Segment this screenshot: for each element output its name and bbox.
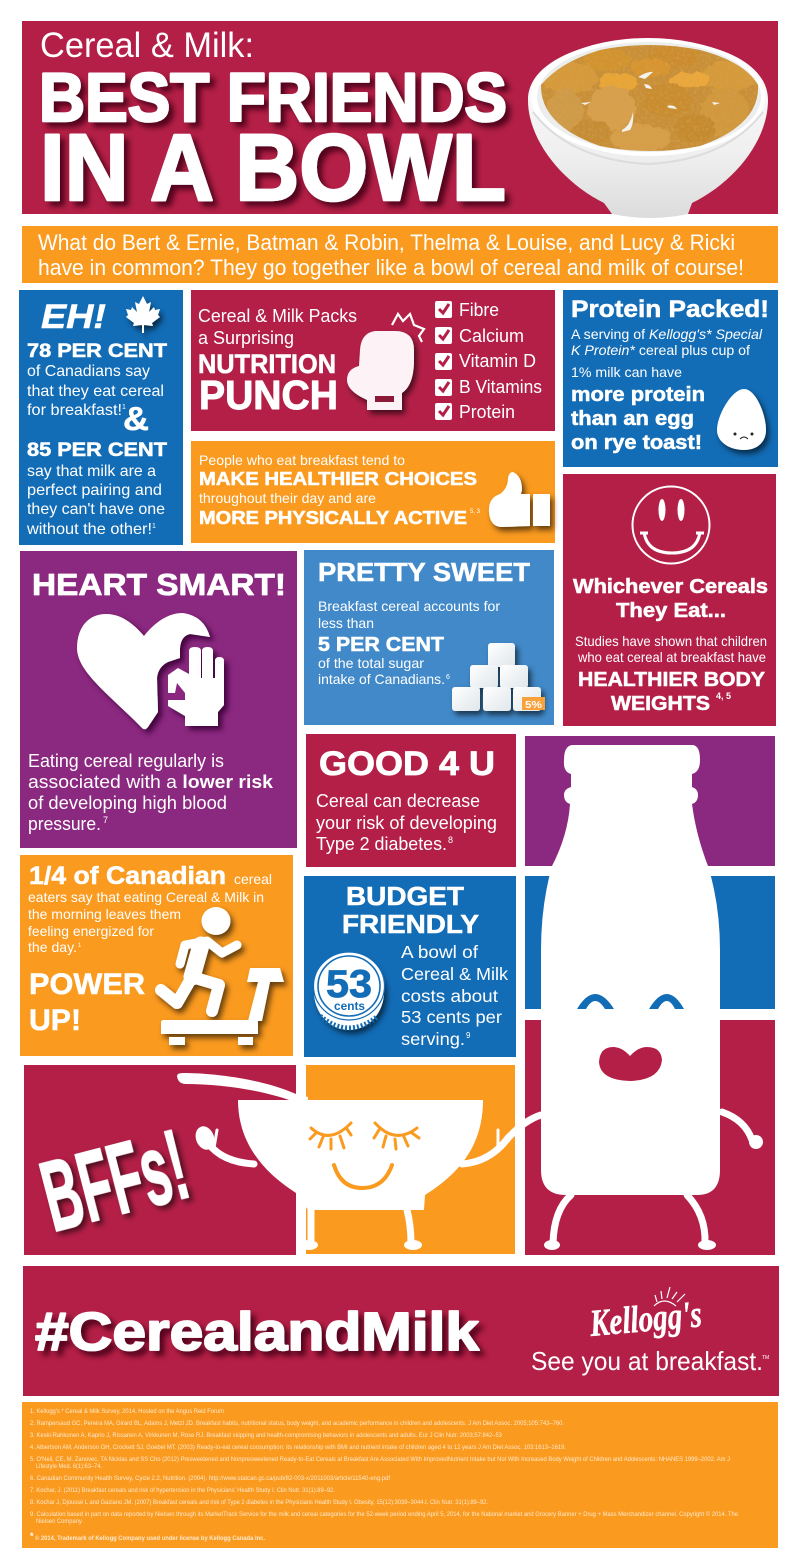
panel: protein packed: A serving of Kellogg's* Special [571, 326, 763, 342]
panel: protein packed: on rye toast! [571, 432, 702, 454]
panel: eh canadians [19, 290, 183, 545]
panel: pretty sweet: intake of Canadians. [318, 671, 445, 687]
tagline: See you at breakfast. [531, 1346, 763, 1376]
panel: heart smart: associated with a lower risk [28, 771, 274, 792]
panel: good 4 u: 8 [448, 835, 453, 845]
panel: budget friendly: serving. [401, 1029, 465, 1049]
character: milk bottle [508, 745, 763, 1250]
panel: whichever cereals [563, 474, 776, 726]
bowl limbs [208, 1130, 508, 1244]
panel: pretty sweet: 6 [446, 674, 450, 681]
references panel: Nielsen Company. [36, 1519, 83, 1525]
stat 85 per cent: 1 [152, 523, 156, 530]
panel: good 4 u: Type 2 diabetes. [316, 834, 447, 854]
icon: sugar cubes [452, 643, 545, 711]
panel: heart smart: pressure. [28, 813, 101, 834]
icon: heart and hand [77, 613, 224, 729]
panel: good 4 u [306, 734, 516, 867]
panel: healthier choices: MORE PHYSICALLY ACTIVE [199, 508, 467, 528]
panel: pretty sweet: PRETTY SWEET [318, 557, 530, 587]
panel: budget friendly: BUDGET [346, 881, 464, 911]
panel: whichever cereals: Studies have shown that children [575, 633, 767, 649]
heading nutrition punch: PUNCH [199, 372, 338, 418]
references panel: 2. Rampersaud GC, Pereira MA, Girard BL, Adams J, Metzl JD. Breakfast habits, nutritional status, body weight, and academic performance in children and adolescents. J Am Diet Assoc. 2005;105:743–760. [30, 1421, 564, 1427]
references panel [22, 1402, 778, 1548]
title: IN A BOWL [40, 115, 506, 221]
intro band: have in common? They go together like a bowl of cereal and milk of course! [38, 255, 744, 280]
panel: budget friendly: A bowl of [401, 942, 478, 962]
stat 78 per cent: 1 [122, 404, 126, 411]
hashtag banner: TM [762, 1355, 769, 1361]
stat 78 per cent: for breakfast! [27, 402, 122, 419]
ampersand: & [123, 400, 149, 437]
panel: whichever cereals: WEIGHTS [611, 693, 710, 715]
panel: budget friendly [304, 876, 516, 1057]
panel: power up: cereal [234, 871, 272, 887]
heading nutrition punch [198, 349, 338, 418]
references panel: 8. Kochar J, Djoussé L and Gaziano JM. (2007) Breakfast cereals and risk of Type 2 diabetes in the Physicians Health Study I. Obesity, 15(12):3039–3044.I. Clin Nutr. 31(1):89–92. [30, 1500, 488, 1506]
panel: heart smart: Eating cereal regularly is [28, 750, 224, 771]
icon: treadmill runner [161, 907, 284, 1045]
panel: power up: POWER [29, 968, 145, 1001]
checklist: Protein [459, 402, 515, 422]
references panel: 7. Kochar, J. (2011) Breakfast cereals and risk of hypertension in the Physicians' Health Study I. Clin Nutr. 31(1):89–92. [30, 1488, 335, 1494]
panel: whichever cereals: who eat cereal at breakfast have [577, 649, 766, 665]
panel: budget friendly: 9 [466, 1031, 471, 1040]
panel: heart smart: of developing high blood [28, 792, 227, 813]
badge 5 percent: 5% [525, 700, 542, 711]
stat 85 per cent: say that milk are a [27, 463, 156, 480]
bffs label: BFFs! [30, 1109, 199, 1253]
panel: power up: the morning leaves them [28, 906, 181, 922]
bowl of cereal photo [528, 38, 768, 218]
panel: protein packed: Protein Packed! [571, 296, 769, 323]
panel: power up: UP! [29, 1004, 81, 1037]
panel: good 4 u: GOOD 4 U [319, 745, 495, 783]
bowl eyes [310, 1123, 419, 1149]
icon: maple leaf [126, 296, 160, 333]
panel: power up: feeling energized for [28, 923, 154, 939]
checklist: B Vitamins [459, 377, 542, 397]
panel: power up: the day. [28, 939, 77, 955]
panel: pretty sweet: of the total sugar [318, 655, 424, 671]
references panel: 9. Calculation based in part on data reported by Nielsen through its MarketTrack Service for the milk and cereal categories for the 52-week period ending April 5, 2014, for the National market and Grocery Banner + Drug + Mass Merchandizer channel. Copyright © 2014. The [30, 1511, 739, 1518]
stat 85 per cent [26, 440, 167, 538]
stat 85 per cent: 85 PER CENT [27, 440, 167, 461]
panel: power up: eaters say that eating Cereal & Milk in [28, 889, 264, 905]
panel: good 4 u: your risk of developing [316, 813, 497, 833]
references panel: 1. Kellogg's * Cereal & Milk Survey, 2014, Hosted on the Angus Reid Forum [30, 1409, 224, 1415]
panel: protein packed [563, 290, 778, 467]
references panel: © 2014, Trademark of Kellogg Company used under license by Kellogg Canada Inc. [35, 1535, 265, 1542]
checklist: Vitamin D [459, 351, 536, 371]
stat 78 per cent: that they eat cereal [27, 383, 164, 400]
panel: good 4 u: Cereal can decrease [316, 791, 480, 811]
panel: protein packed: more protein [571, 384, 705, 406]
references panel: Lifestyle Med. 6(1):63–74. [36, 1464, 102, 1470]
icon: boxing glove [347, 314, 424, 410]
icon: thumbs up [489, 472, 550, 527]
references panel: * [30, 1531, 34, 1541]
bowl spoon stroke [177, 1073, 308, 1101]
panel: pretty sweet [304, 550, 554, 725]
checklist: Fibre [459, 300, 499, 320]
panel: budget friendly: FRIENDLY [342, 909, 479, 939]
title [39, 59, 507, 221]
stat 85 per cent: perfect pairing and [27, 482, 162, 499]
references panel: 3. Keski-Rahkonen A, Kaprio J, Rissanen A, Virkkunen M, Rose RJ. Breakfast skipping and health-compromising behaviors in adolescents and adults. Eur J Clin Nutr. 2003;57:842–53 [30, 1433, 503, 1439]
panel: whichever cereals: Whichever Cereals [573, 576, 768, 598]
panel: healthier choices: throughout their day and are [199, 490, 376, 506]
stat 78 per cent: 78 PER CENT [27, 341, 167, 362]
panel: power up: 1 [78, 943, 82, 949]
panel: pretty sweet: less than [318, 615, 374, 631]
panel: budget friendly: costs about [401, 986, 498, 1006]
header kicker: Cereal & Milk: [40, 26, 254, 65]
panel: pretty sweet: 5 PER CENT [318, 634, 444, 656]
checklist: Calcium [459, 326, 524, 346]
references panel: 5. O'Neil, CE, M. Zanovec, TA Nicklas and SS Cho (2012) Presweetened and Nonpresweetened Ready-to-Eat Cereals at Breakfast Are Associated With ImprovedNutrient Intake but Not With Increased Body Weight of Children and Adolescents: NHANES 1999–2002. Am J [30, 1457, 730, 1463]
bowl smile [334, 1165, 392, 1188]
panel: budget friendly: Cereal & Milk [401, 964, 508, 984]
bottle eyes [577, 994, 684, 1009]
header panel [22, 21, 778, 221]
hashtag: #CerealandMilk [35, 1302, 480, 1362]
stat 78 per cent [27, 341, 167, 419]
title: BEST FRIENDS [39, 59, 507, 136]
icon: 53 cent coin: 53 [326, 963, 372, 1006]
panel: whichever cereals: 4, 5 [716, 691, 731, 701]
panel: protein packed: 1% milk can have [571, 364, 682, 380]
checklist [435, 300, 542, 422]
panel: protein packed: than an egg [571, 408, 694, 430]
panel: protein packed: K Protein* cereal plus cup of [571, 342, 750, 358]
intro band: What do Bert & Ernie, Batman & Robin, Thelma & Louise, and Lucy & Ricki [38, 230, 735, 255]
panel: healthier choices: MAKE HEALTHIER CHOICES [199, 469, 477, 489]
panel: heart smart [20, 551, 297, 848]
panel: healthier choices: 5, 3 [470, 509, 481, 515]
icon: 53 cent coin: cents [334, 999, 365, 1013]
panel: nutrition punch: Cereal & Milk Packs [198, 306, 357, 326]
references panel: 4. Albertson AM, Anderson GH, Crockett SJ, Goebel MT. (2003) Ready-to-eat cereal consumption: its relationship with BMI and nutrient intake of children aged 4 to 12 years J Am Diet Assoc. 103:1613–1619. [30, 1445, 566, 1451]
stat 85 per cent: they can't have one [27, 501, 165, 518]
panel: healthier choices: People who eat breakfast tend to [199, 452, 405, 468]
background panels behind characters [24, 736, 775, 1255]
panel: healthier choices [191, 441, 555, 543]
panel: heart smart: 7 [103, 815, 108, 825]
kelloggs logo: Kellogg's [587, 1293, 703, 1345]
hashtag banner [23, 1266, 779, 1396]
icon: smiley [632, 486, 710, 564]
heading eh: EH! [41, 298, 106, 336]
bottle body [541, 745, 720, 1195]
panel: pretty sweet: Breakfast cereal accounts for [318, 598, 500, 614]
panel: whichever cereals: They Eat... [616, 600, 726, 622]
icon: sad egg [717, 389, 766, 450]
intro band [22, 226, 778, 283]
heading nutrition punch: NUTRITION [198, 349, 336, 379]
bottle mouth [599, 1047, 662, 1081]
character: cereal bowl [177, 1073, 508, 1255]
bowl body [238, 1100, 483, 1210]
panel: power up [20, 855, 293, 1056]
panel: budget friendly: 53 cents per [401, 1007, 502, 1027]
stat 78 per cent: of Canadians say [27, 363, 150, 380]
references panel: 6. Canadian Community Health Survey, Cycle 2.2, Nutrition. (2004). http://www.statcan.gc.ca/pub/82-003-x/2011003/article/11540-eng.pdf [30, 1476, 390, 1482]
panel: nutrition punch: a Surprising [198, 328, 294, 348]
panel: whichever cereals: HEALTHIER BODY [578, 669, 766, 691]
panel: heart smart: HEART SMART! [32, 567, 286, 602]
stat 85 per cent: without the other! [26, 521, 152, 538]
bottle limbs [508, 1112, 752, 1243]
panel: power up: 1/4 of Canadian [29, 862, 226, 890]
icon: 53 cent coin [314, 952, 384, 1030]
panel: nutrition punch [191, 290, 555, 431]
